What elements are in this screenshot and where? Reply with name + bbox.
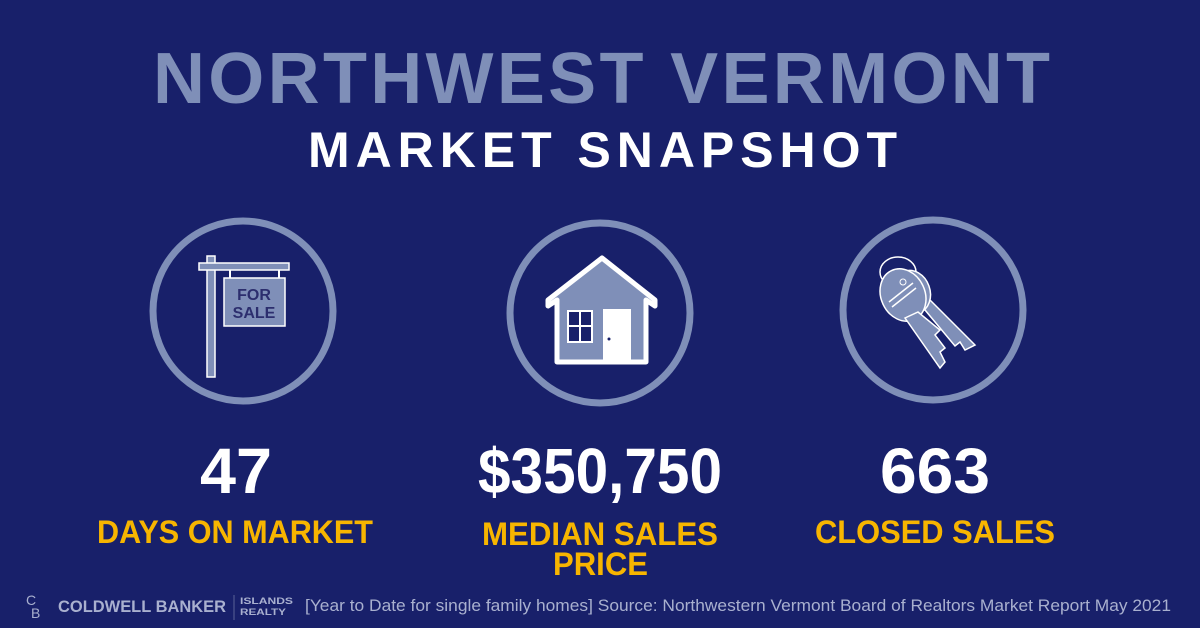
panel: closed sales xyxy=(815,220,1055,550)
number: $350,750: $350,750 xyxy=(478,435,722,507)
icon: keys xyxy=(843,220,1023,400)
number: 47: 47 xyxy=(200,435,272,507)
label: median sales price: PRICE xyxy=(553,546,648,582)
footer logo: ISLANDS xyxy=(240,596,293,606)
footer logo: REALTY xyxy=(240,607,286,617)
label: closed sales: CLOSED SALES xyxy=(815,514,1055,550)
label: median sales price xyxy=(482,516,718,582)
footer logo xyxy=(26,592,293,621)
subtitle: MARKET SNAPSHOT xyxy=(308,122,897,178)
panel: days on market xyxy=(97,221,373,550)
footer logo: COLDWELL BANKER xyxy=(58,597,226,616)
footer source text: [Year to Date for single family homes] Source: Northwestern Vermont Board of Realtors Market Report May 2021 xyxy=(305,596,1171,615)
icon: for sale sign xyxy=(153,221,333,401)
icon: for sale sign: FOR xyxy=(237,287,271,304)
footer logo: C xyxy=(26,592,36,608)
label: median sales price: MEDIAN SALES xyxy=(482,516,718,552)
icon: for sale sign: SALE xyxy=(233,305,276,322)
icon: house xyxy=(510,223,690,403)
panel: median sales price xyxy=(478,223,722,582)
title: NORTHWEST VERMONT xyxy=(153,39,1050,119)
label: days on market: DAYS ON MARKET xyxy=(97,514,373,550)
footer logo: B xyxy=(31,605,40,621)
number: 663: 663 xyxy=(880,435,990,507)
